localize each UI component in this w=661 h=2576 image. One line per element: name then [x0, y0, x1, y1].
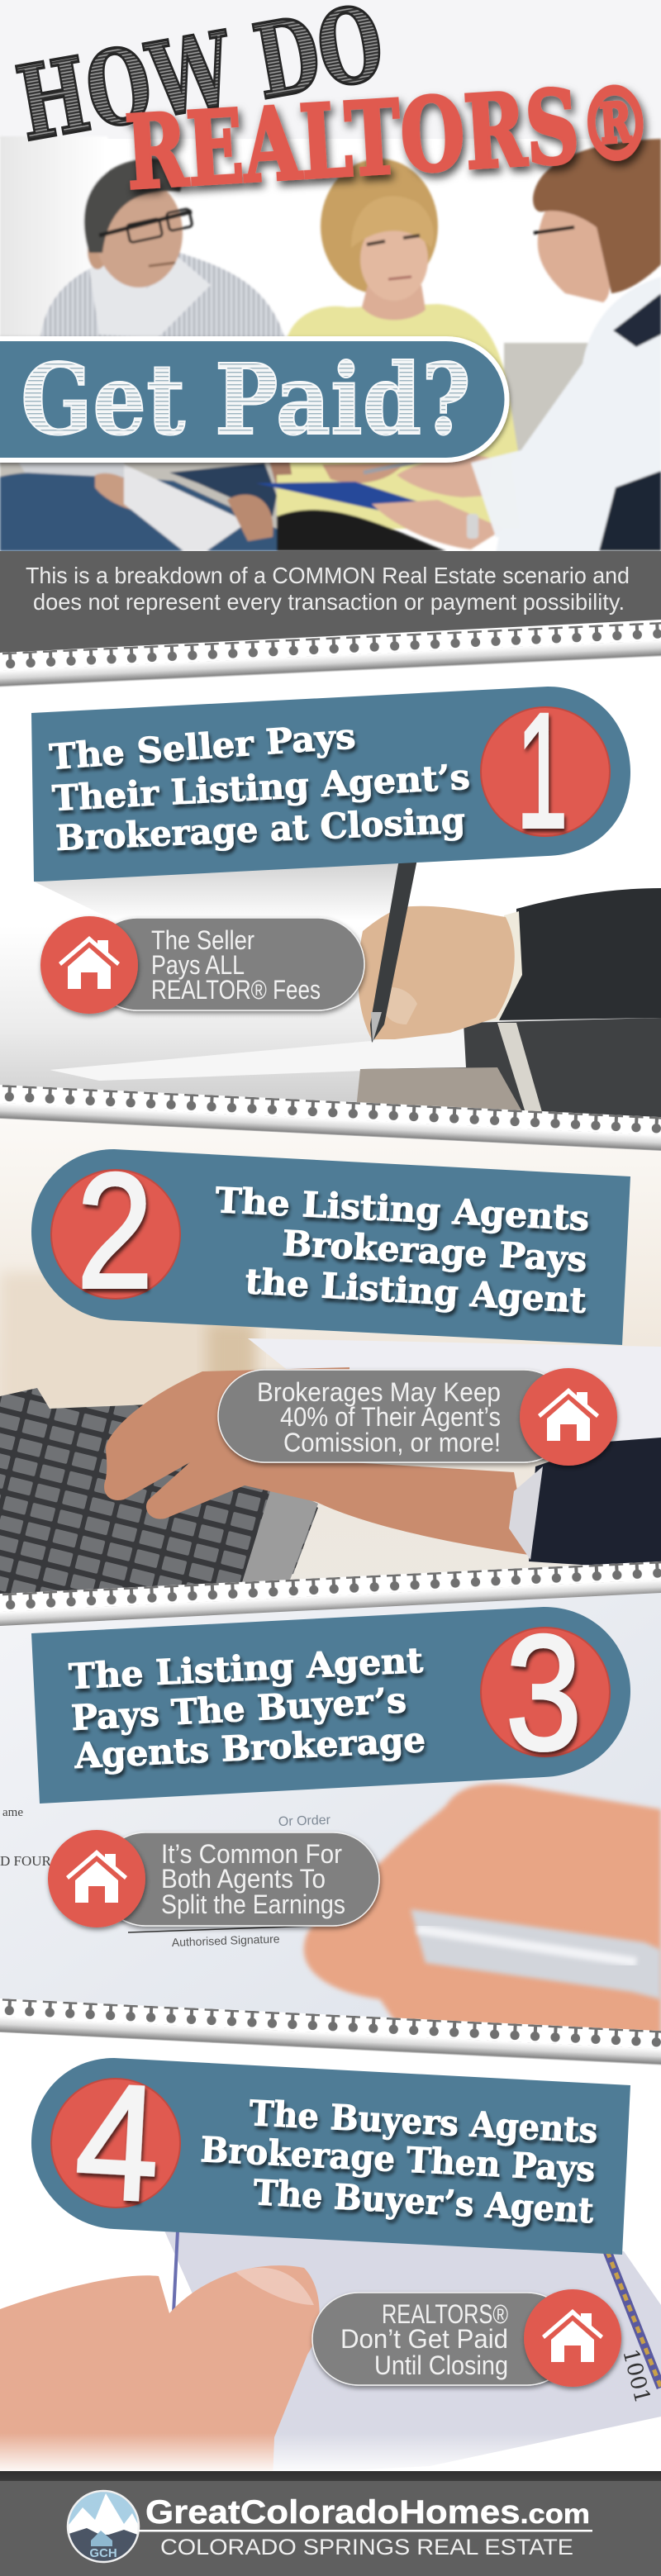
callout text: Don’t Get Paid — [340, 2324, 508, 2354]
photo: hand signing a document — [0, 661, 661, 1132]
intro text: This is a breakdown of a COMMON Real Estate scenario and — [26, 563, 630, 588]
callout: common split — [48, 1830, 379, 1927]
callout: seller pays — [40, 916, 364, 1014]
callout text: 40% of Their Agent’s — [280, 1402, 501, 1432]
number circle: 2: 2 — [77, 1139, 153, 1322]
panel: step 1 — [0, 661, 661, 1153]
icon: logo with mountains — [66, 2491, 142, 2568]
photo: hand typing on keyboard — [0, 1119, 661, 1619]
callout text: Split the Earnings — [161, 1889, 345, 1919]
heading: Get Paid: Get Paid? — [21, 342, 471, 457]
callout text: Brokerages May Keep — [257, 1377, 501, 1407]
intro text line two: does not represent every transaction or payment possibility. — [33, 589, 625, 615]
callout text — [161, 1839, 345, 1919]
brand name: GreatColoradoHomes .com — [145, 2494, 590, 2531]
icon: house — [524, 2289, 621, 2387]
panel: step 3 — [0, 1593, 661, 2067]
heading: step 2 — [215, 1180, 590, 1321]
icon: house — [520, 1368, 617, 1466]
callout text — [340, 2299, 508, 2380]
heading: step 4: The Buyer’s Agent — [252, 2172, 595, 2231]
photo: hand signing a cheque: ame — [2, 1806, 23, 1819]
number circle: 3: 3 — [506, 1601, 582, 1784]
heading: step 1: The Seller Pays — [48, 715, 357, 777]
banner: step 4 — [31, 2049, 630, 2255]
callout text — [257, 1377, 501, 1457]
tagline: COLORADO SPRINGS REAL ESTATE — [160, 2535, 573, 2559]
banner: step 2 — [31, 1139, 630, 1345]
panel: header — [0, 0, 661, 688]
banner: step 3 — [31, 1601, 630, 1804]
callout text: REALTORS® — [382, 2299, 508, 2329]
callout text: It’s Common For — [161, 1839, 342, 1869]
banner: Get Paid — [0, 339, 507, 460]
callout text — [151, 925, 321, 1005]
photo: hand signing a cheque: Or Order — [278, 1813, 331, 1829]
number circle: 1: 1 — [516, 679, 568, 862]
callout text: Both Agents To — [161, 1864, 326, 1894]
heading: step 4 — [199, 2093, 598, 2231]
callout text: Pays ALL — [151, 950, 245, 980]
panel: step 2 — [0, 1119, 661, 1629]
photo: hand signing a cheque: Authorised Signature — [172, 1932, 280, 1949]
footer — [0, 2471, 661, 2576]
heading: step 2: Brokerage Pays — [281, 1223, 588, 1280]
number circle: 4: 4 — [72, 2049, 164, 2236]
callout text: REALTOR® Fees — [151, 975, 321, 1005]
icon: house — [48, 1830, 145, 1927]
heading: step 1: Brokerage at Closing — [55, 800, 466, 858]
header photo: couple meeting with an agent — [0, 136, 661, 554]
callout: paid at closing — [312, 2289, 621, 2387]
heading: step 2: The Listing Agents — [215, 1180, 590, 1238]
callout: brokerages may keep — [218, 1368, 617, 1466]
photo: hand holding a cheque: 1001 — [617, 2346, 654, 2406]
callout text: Comission, or more! — [283, 1428, 501, 1457]
callout text: Until Closing — [374, 2350, 508, 2380]
icon: house — [40, 916, 138, 1014]
heading: step 2: the Listing Agent — [244, 1261, 587, 1321]
heading: step 3 — [68, 1640, 426, 1776]
heading: step 3: Pays The Buyer’s — [70, 1680, 407, 1738]
photo: hand signing a cheque: D FOUR — [0, 1853, 52, 1869]
heading: step 1: Their Listing Agent’s — [51, 757, 471, 819]
photo: hand holding a cheque — [0, 2032, 661, 2481]
panel: step 4 — [0, 2032, 661, 2481]
callout text: The Seller — [151, 925, 254, 955]
icon: logo with mountains: GCH — [89, 2546, 117, 2560]
intro band — [0, 551, 661, 653]
heading: step 3: The Listing Agent — [68, 1640, 425, 1697]
heading: step 3: Agents Brokerage — [73, 1719, 426, 1776]
heading: step 1 — [48, 715, 471, 858]
banner: step 1 — [31, 679, 630, 882]
heading: step 4: Brokerage Then Pays — [199, 2129, 596, 2189]
heading: step 4: The Buyers Agents — [248, 2093, 598, 2151]
photo: hand signing a cheque — [0, 1593, 661, 2049]
